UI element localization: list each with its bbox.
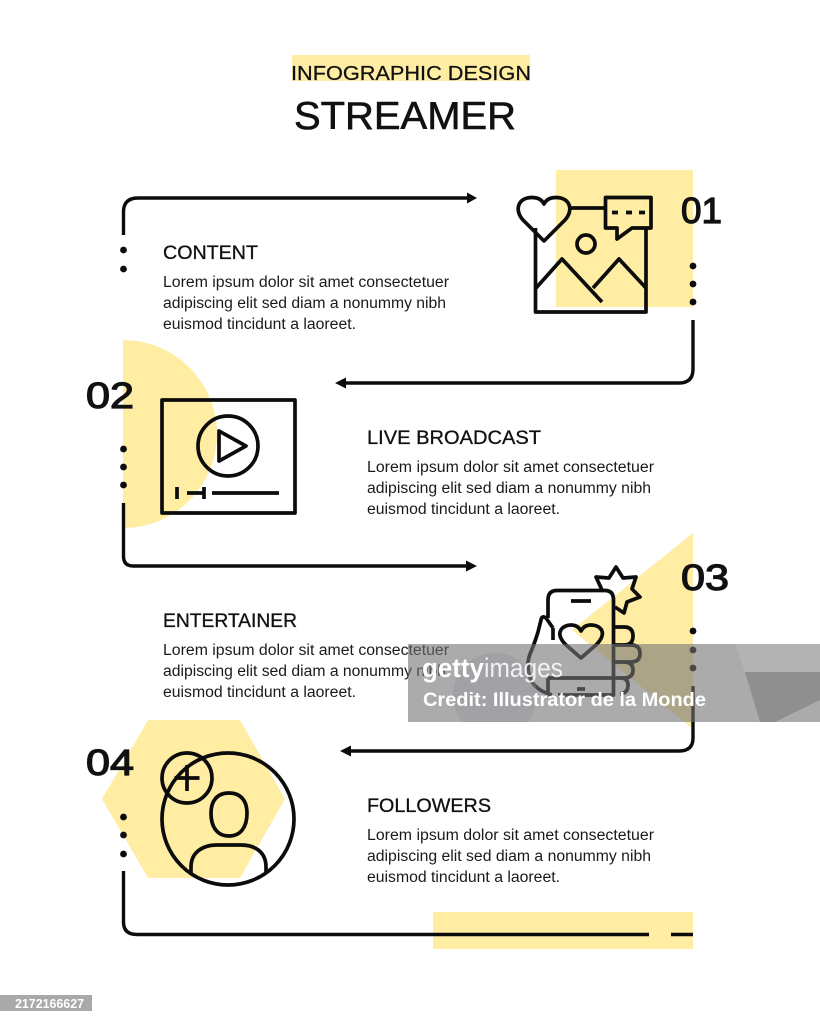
icon: add follower: [162, 753, 294, 885]
step 01 text: Lorem ipsum dolor sit amet consectetuer: [163, 274, 449, 291]
step 01 connector arrow: [120, 192, 477, 272]
step 02 text: adipiscing elit sed diam a nonummy nibh: [367, 480, 651, 497]
watermark band: Credit: Illustrator de la Monde: [423, 690, 706, 711]
step 03 text: euismod tincidunt a laoreet.: [163, 684, 356, 701]
step 01 text: adipiscing elit sed diam a nonummy nibh: [163, 295, 446, 312]
step 03 text: adipiscing elit sed diam a nonummy nibh: [163, 663, 446, 680]
step 02 text: LIVE BROADCAST: [367, 428, 541, 449]
watermark band: getty: [422, 653, 484, 683]
step 04 text: [367, 796, 654, 886]
number 01: 01: [681, 190, 722, 231]
step 03 text: Lorem ipsum dolor sit amet consectetuer: [163, 642, 449, 659]
bottom connector line: [120, 814, 693, 934]
step 02 text: Lorem ipsum dolor sit amet consectetuer: [367, 459, 654, 476]
number 03: 03: [681, 557, 729, 598]
title block: INFOGRAPHIC DESIGN: [291, 63, 531, 85]
title block: STREAMER: [294, 95, 516, 138]
title block: [291, 55, 531, 138]
step 02 text: euismod tincidunt a laoreet.: [367, 501, 560, 518]
image id tag: [0, 995, 92, 1011]
step 03 text: ENTERTAINER: [163, 611, 297, 632]
icon: hand holding phone with heart and star: [528, 567, 640, 695]
step 04 text: euismod tincidunt a laoreet.: [367, 869, 560, 886]
step 04 text: adipiscing elit sed diam a nonummy nibh: [367, 848, 651, 865]
step 01 text: [163, 243, 449, 333]
step 04 text: Lorem ipsum dolor sit amet consectetuer: [367, 827, 654, 844]
step 02 yellow half circle: [123, 340, 217, 528]
watermark band: images: [484, 653, 563, 683]
step 04 text: FOLLOWERS: [367, 796, 491, 817]
step 04 connector arrow: [340, 628, 696, 756]
watermark band: [408, 644, 820, 722]
step 02 connector arrow: [335, 263, 696, 388]
number 04: 04: [86, 742, 134, 783]
number 02: 02: [86, 375, 134, 416]
step 04 yellow hexagon: [102, 720, 285, 878]
icon: photo with heart and chat bubble: [518, 198, 651, 312]
step 01 text: euismod tincidunt a laoreet.: [163, 316, 356, 333]
step 03 text: [163, 611, 449, 701]
image id tag: 2172166627: [15, 997, 84, 1011]
step 01 yellow square: [556, 170, 693, 307]
step 03 yellow triangle: [572, 533, 693, 729]
step 02 text: [367, 428, 654, 518]
step 03 connector arrow: [120, 446, 477, 572]
step 01 text: CONTENT: [163, 243, 258, 264]
bottom yellow bar: [433, 912, 693, 949]
icon: video player: [162, 400, 295, 513]
